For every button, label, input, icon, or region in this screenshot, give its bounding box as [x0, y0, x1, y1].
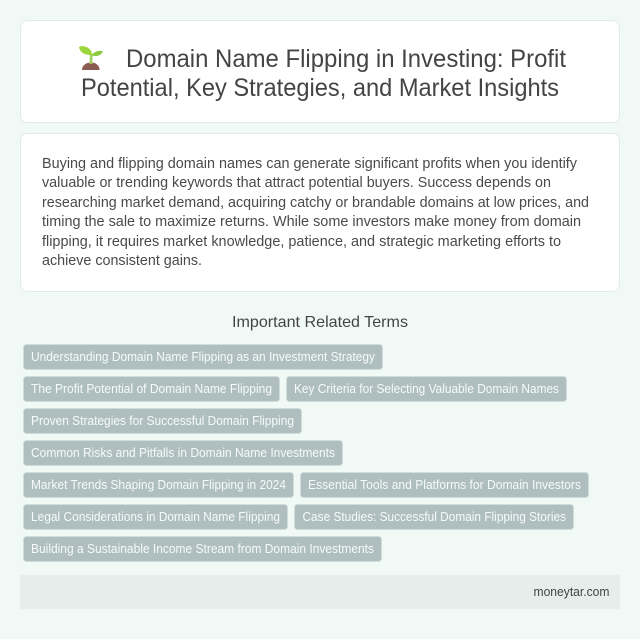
summary paragraph: [42, 156, 589, 269]
tag: understanding: [24, 344, 382, 370]
tag: sustainable income: [24, 536, 382, 562]
tag: key criteria: Key Criteria for Selecting Valuable Domain Names: [294, 382, 559, 396]
panel: summary card: [20, 134, 620, 292]
panel: term tags: [24, 344, 588, 562]
tag: case studies: [294, 504, 574, 530]
tag: key criteria: [286, 376, 566, 402]
summary paragraph: flipping, it requires market knowledge, patience, and strategic marketing efforts to: [42, 234, 561, 250]
tag: understanding: Understanding Domain Name Flipping as an Investment Strategy: [31, 350, 376, 364]
tag: proven strategies: Proven Strategies for Successful Domain Flipping: [31, 414, 294, 428]
tag: essential tools: [300, 472, 588, 498]
footer bar: [20, 575, 620, 609]
tag: proven strategies: [24, 408, 302, 434]
tag: sustainable income: Building a Sustainable Income Stream from Domain Investments: [31, 542, 374, 556]
icon: seedling: [79, 46, 103, 70]
title line 1: Domain Name Flipping in Investing: Profit: [126, 45, 566, 73]
summary paragraph: valuable or trending keywords that attract potential buyers. Success depends on: [42, 175, 551, 191]
tag: essential tools: Essential Tools and Platforms for Domain Investors: [308, 478, 581, 492]
tag: common risks: [24, 440, 342, 466]
tag: market trends: [24, 472, 294, 498]
summary paragraph: Buying and flipping domain names can generate significant profits when you identify: [42, 156, 578, 172]
footer site name: moneytar.com: [534, 585, 610, 599]
heading: important related terms: Important Related Terms: [232, 314, 408, 331]
summary paragraph: timing the sale to maximize returns. While some investors make money from domain: [42, 214, 581, 230]
tag: legal considerations: [24, 504, 288, 530]
panel: title card: [20, 20, 620, 122]
tag: case studies: Case Studies: Successful Domain Flipping Stories: [302, 510, 566, 524]
summary paragraph: researching market demand, acquiring catchy or brandable domains at low prices, and: [42, 195, 589, 211]
tag: common risks: Common Risks and Pitfalls in Domain Name Investments: [31, 446, 335, 460]
tag: profit potential: The Profit Potential of Domain Name Flipping: [31, 382, 272, 396]
tag: legal considerations: Legal Considerations in Domain Name Flipping: [31, 510, 280, 524]
tag: market trends: Market Trends Shaping Domain Flipping in 2024: [31, 478, 286, 492]
summary paragraph: achieve consistent gains.: [42, 253, 202, 269]
tag: profit potential: [24, 376, 280, 402]
title line 2: Potential, Key Strategies, and Market Insights: [81, 74, 559, 102]
